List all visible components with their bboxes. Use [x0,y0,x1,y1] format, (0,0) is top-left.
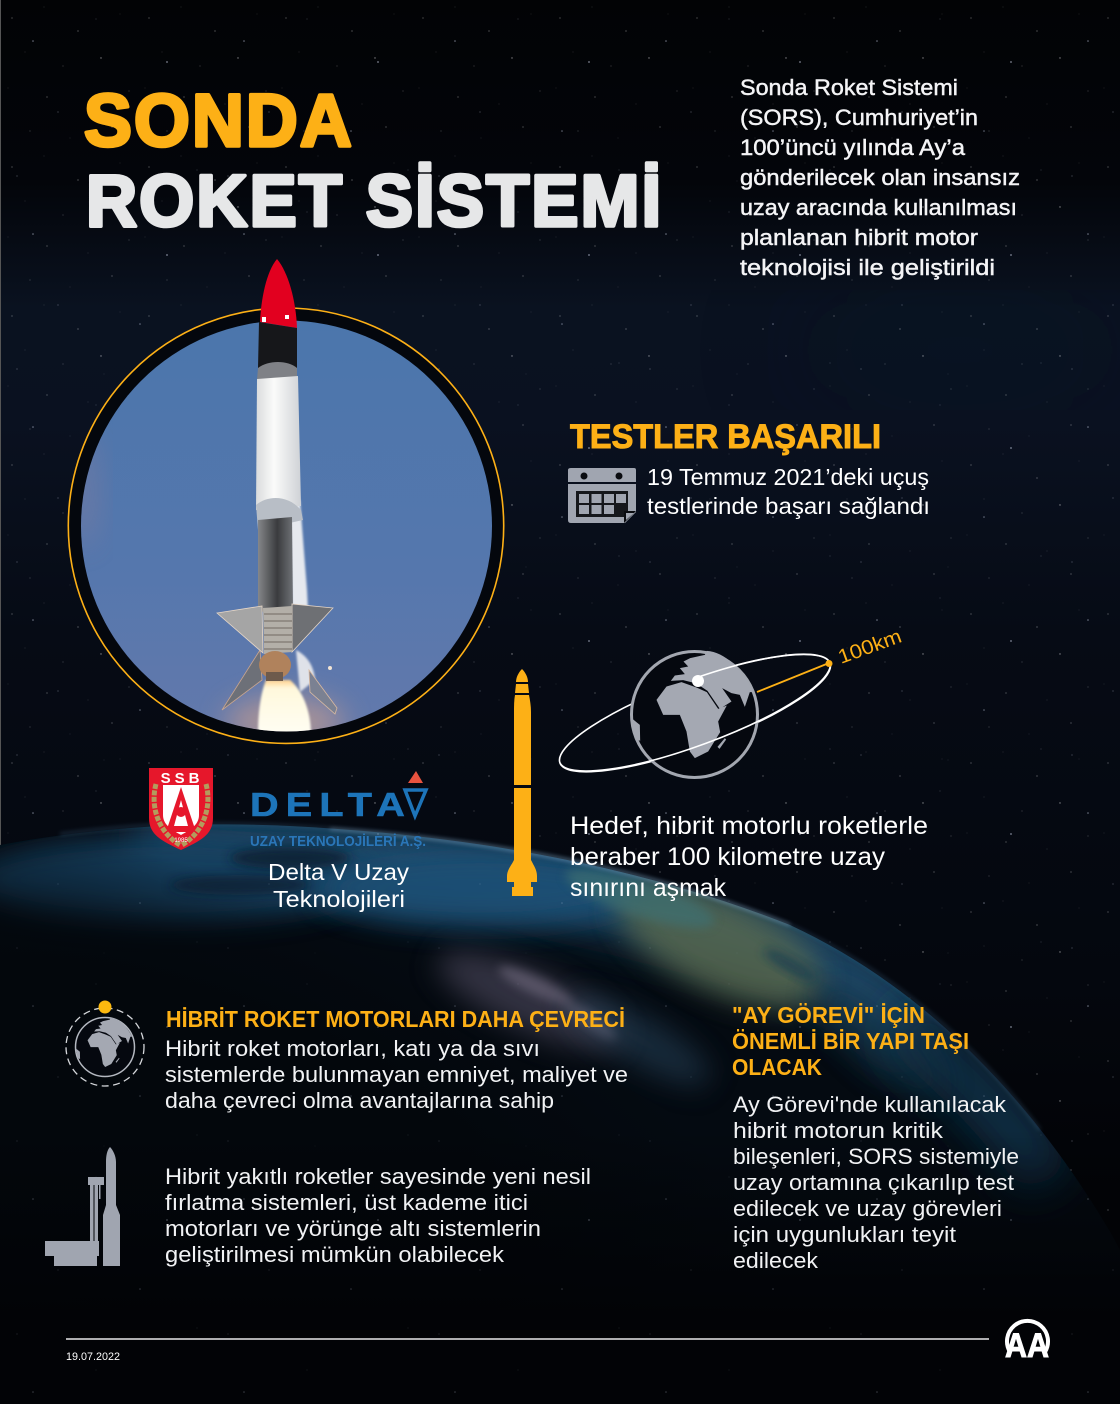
title: SONDA [84,80,352,162]
text: target: sınırını aşmak [570,874,726,902]
text block: moon mission: için uygunlukları teyit [733,1222,956,1247]
logo: SSB [149,768,213,850]
logo: AA: AA [1005,1327,1049,1365]
title [84,80,661,242]
text block: moon mission: uzay ortamına çıkarılıp test [733,1170,1014,1195]
footer rule [66,1338,989,1340]
text block: next generation systems: motorları ve yörünge altı sistemlerin [165,1216,541,1241]
heading: Testler Başarılı: TESTLER BAŞARILI [570,418,881,456]
text block: next generation systems: fırlatma sistemleri, üst kademe itici [165,1190,528,1215]
text block: hybrid motors: HİBRİT ROKET MOTORLARI DAHA ÇEVRECİ [166,1006,625,1032]
text: test date [647,464,930,519]
text block: hybrid motors [165,1006,628,1113]
text block: hybrid motors: daha çevreci olma avantajlarına sahip [165,1088,554,1113]
icon: yellow rocket [507,669,537,896]
caption: Delta V Uzay Teknolojileri: Teknolojileri [273,886,405,912]
intro text block: 100’üncü yılında Ay’a [740,135,966,160]
intro text block: gönderilecek olan insansız [740,165,1020,190]
text block: moon mission: bileşenleri, SORS sistemiyle [733,1144,1019,1169]
icon: globe with satellite [66,1000,144,1086]
text block: next generation systems [165,1164,591,1267]
intro text block: uzay aracında kullanılması [740,195,1017,220]
text block: hybrid motors: sistemlerde bulunmayan emniyet, maliyet ve [165,1062,628,1087]
text: test date: 19 Temmuz 2021’deki uçuş [647,464,929,490]
footer date: 19.07.2022 [66,1351,120,1363]
text: target: Hedef, hibrit motorlu roketlerle [570,812,928,840]
logo: Delta V: DELTA [250,786,405,823]
rocket [217,259,337,714]
panel: rocket photo circle [68,259,504,748]
caption: Delta V Uzay Teknolojileri [268,859,410,912]
intro text block: teknolojisi ile geliştirildi [740,255,995,280]
icon: calendar [568,468,636,523]
text block: moon mission: OLACAK [732,1054,822,1080]
text: target [570,812,928,902]
text block: moon mission [732,1002,1019,1273]
intro text block: (SORS), Cumhuriyet’in [740,105,978,130]
caption: Delta V Uzay Teknolojileri: Delta V Uzay [268,859,410,885]
text block: next generation systems: Hibrit yakıtlı roketler sayesinde yeni nesil [165,1164,591,1189]
intro text block [740,75,1020,280]
text block: moon mission: edilecek ve uzay görevleri [733,1196,1002,1221]
title: ROKET SİSTEMİ [86,161,661,242]
text block: moon mission: edilecek [733,1248,819,1273]
icon: launch pad [45,1147,120,1266]
logo: Delta V: UZAY TEKNOLOJİLERİ A.Ş. [250,833,426,850]
logo: SSB: SSB [161,770,203,787]
text block: moon mission: hibrit motorun kritik [733,1118,944,1143]
logo: SSB: 1985 [174,838,188,844]
earth horizon [0,800,1120,1404]
text: test date: testlerinde başarı sağlandı [647,493,930,519]
text block: moon mission: "AY GÖREVİ" İÇİN [732,1002,925,1028]
text block: moon mission: Ay Görevi'nde kullanılacak [733,1092,1007,1117]
text block: moon mission: ÖNEMLİ BİR YAPI TAŞI [732,1028,969,1054]
text block: next generation systems: geliştirilmesi mümkün olabilecek [165,1242,505,1267]
diagram: globe with orbit [548,625,905,794]
text: target: beraber 100 kilometre uzay [570,843,886,871]
logo: Delta V [250,771,426,850]
diagram: globe with orbit: 100km [835,625,905,669]
intro text block: Sonda Roket Sistemi [740,75,958,100]
intro text block: planlanan hibrit motor [740,225,978,250]
text block: hybrid motors: Hibrit roket motorları, katı ya da sıvı [165,1036,540,1061]
